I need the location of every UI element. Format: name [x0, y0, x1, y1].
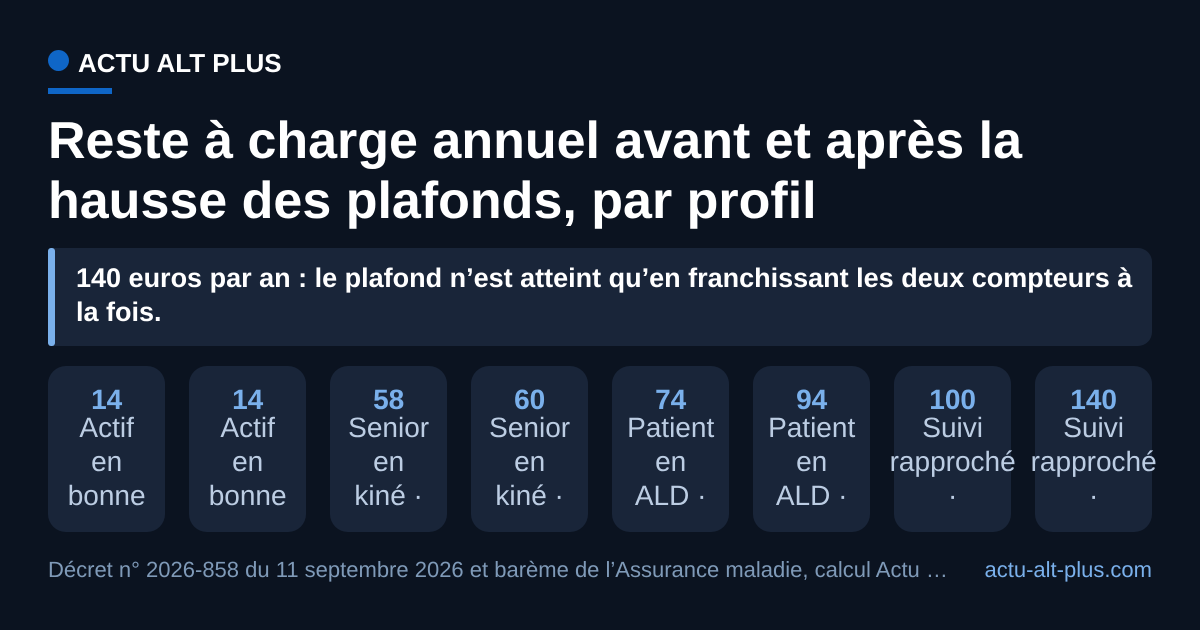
icon: brand dot: [48, 50, 69, 71]
card: Suivi rapproché 100: 100: [929, 384, 976, 415]
card: Actif en bonne 14 second: Actif: [220, 412, 275, 443]
card: Senior en kiné 60: kiné ·: [495, 480, 564, 511]
card: Patient en ALD 74: [612, 366, 729, 532]
card: Actif en bonne 14: 14: [91, 384, 122, 415]
card: Actif en bonne 14: en: [91, 446, 122, 477]
brand name: ACTU ALT PLUS: [78, 48, 282, 78]
card: Patient en ALD 74: 74: [655, 384, 686, 415]
brand underline: [48, 88, 112, 94]
card: Actif en bonne 14 second: bonne: [209, 480, 287, 511]
card: Suivi rapproché 140: rapproché: [1031, 446, 1157, 477]
card: Senior en kiné 60: Senior: [489, 412, 570, 443]
title: Reste à charge annuel avant et après la: [48, 112, 1022, 170]
card: Actif en bonne 14: bonne: [68, 480, 146, 511]
callout text: la fois.: [76, 297, 162, 327]
card: Senior en kiné 58: Senior: [348, 412, 429, 443]
card: Patient en ALD 74: ALD ·: [635, 480, 706, 511]
callout text: [76, 263, 1132, 327]
title: [48, 112, 1022, 230]
site link: actu-alt-plus.com: [984, 557, 1152, 582]
callout: [48, 248, 1152, 346]
card: Patient en ALD 74: en: [655, 446, 686, 477]
brand header: [48, 48, 282, 94]
card: Senior en kiné 58: [330, 366, 447, 532]
callout text: 140 euros par an : le plafond n’est atteint qu’en franchissant les deux compteurs à: [76, 263, 1132, 293]
card: Actif en bonne 14 second: en: [232, 446, 263, 477]
card: Patient en ALD 74: Patient: [627, 412, 714, 443]
card: Suivi rapproché 100: [894, 366, 1011, 532]
card: Patient en ALD 94: Patient: [768, 412, 855, 443]
card: Patient en ALD 94: 94: [796, 384, 827, 415]
card: Senior en kiné 58: kiné ·: [354, 480, 423, 511]
card: Patient en ALD 94: [753, 366, 870, 532]
source text: Décret n° 2026-858 du 11 septembre 2026 et barème de l’Assurance maladie, calcul Actu …: [48, 557, 948, 582]
card: Actif en bonne 14 second: [189, 366, 306, 532]
title: hausse des plafonds, par profil: [48, 172, 817, 230]
card: Suivi rapproché 140: Suivi: [1063, 412, 1124, 443]
card: Suivi rapproché 140: [1035, 366, 1152, 532]
card: Actif en bonne 14: [48, 366, 165, 532]
card: Actif en bonne 14: Actif: [79, 412, 134, 443]
callout panel background: [51, 248, 1152, 346]
card: Patient en ALD 94: en: [796, 446, 827, 477]
card: Senior en kiné 60: 60: [514, 384, 545, 415]
card: Suivi rapproché 100: ·: [948, 480, 957, 511]
card: Senior en kiné 58: 58: [373, 384, 404, 415]
card: Suivi rapproché 100: Suivi: [922, 412, 983, 443]
card: Suivi rapproché 100: rapproché: [890, 446, 1016, 477]
card: Suivi rapproché 140: 140: [1070, 384, 1117, 415]
card: Actif en bonne 14 second: 14: [232, 384, 263, 415]
card: Senior en kiné 60: en: [514, 446, 545, 477]
card: Patient en ALD 94: ALD ·: [776, 480, 847, 511]
card: Senior en kiné 60: [471, 366, 588, 532]
callout accent bar: [48, 248, 54, 346]
panel: profile cards: [48, 366, 1157, 532]
card: Suivi rapproché 140: ·: [1089, 480, 1098, 511]
card: Senior en kiné 58: en: [373, 446, 404, 477]
